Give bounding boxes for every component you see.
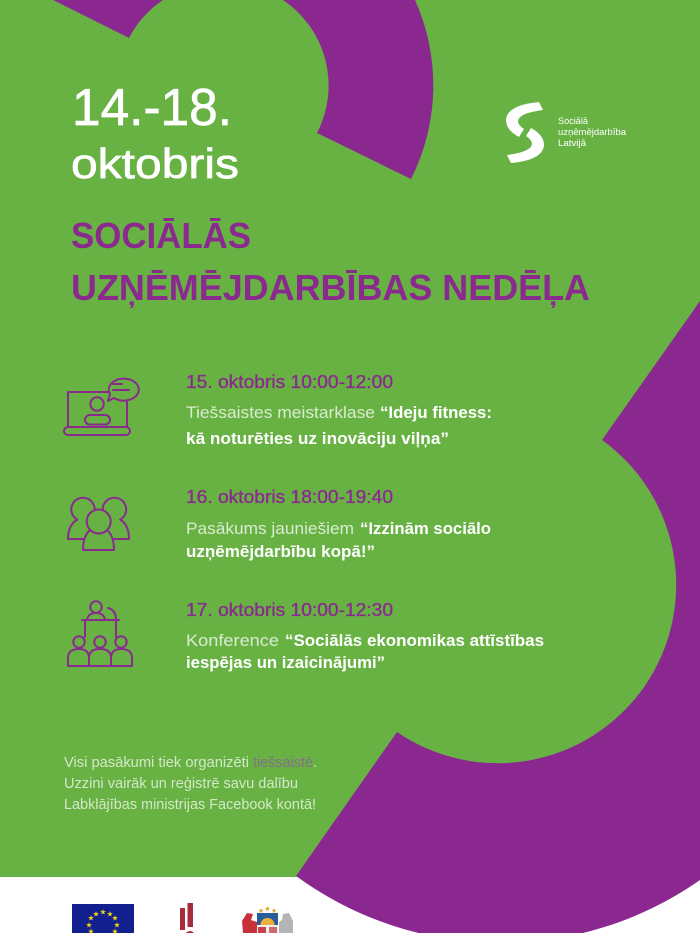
logo: coat of arms of Latvia: ★ bbox=[258, 907, 264, 915]
logo: EU flag: ★ bbox=[93, 910, 100, 918]
title: SOCIĀLĀS bbox=[71, 215, 251, 256]
event 2: 16. oktobris 18:00-19:40 bbox=[186, 487, 393, 507]
logo text: uzņēmējdarbība bbox=[558, 127, 626, 137]
date heading bbox=[71, 79, 239, 187]
event 1: “Ideju fitness: bbox=[380, 403, 492, 422]
logo text: Sociālā bbox=[558, 116, 588, 126]
event 3: 17. oktobris 10:00-12:30 bbox=[186, 600, 393, 620]
logo: coat of arms of Latvia bbox=[242, 905, 293, 933]
event 1: 15. oktobris 10:00-12:00 bbox=[186, 372, 393, 392]
logo: red mark bbox=[180, 903, 195, 933]
logo: EU flag: ★ bbox=[114, 920, 121, 930]
event 2: Pasākums jauniešiem bbox=[186, 519, 354, 538]
event 2: “Izzinām sociālo bbox=[360, 519, 491, 538]
logo: EU flag: ★ bbox=[100, 908, 107, 916]
logo text: Latvijā bbox=[558, 138, 586, 148]
large purple arc shape bbox=[296, 301, 700, 933]
date heading: 14.-18. bbox=[72, 79, 232, 137]
event 3: “Sociālās ekonomikas attīstības bbox=[285, 631, 544, 650]
closing note: Labklājības ministrijas Facebook kontā! bbox=[64, 797, 316, 813]
event 1: kā noturēties uz inovāciju viļņa” bbox=[186, 429, 449, 448]
closing note bbox=[64, 755, 317, 813]
logo: EU flag: ★ bbox=[88, 914, 95, 922]
logo: EU flag bbox=[72, 904, 134, 933]
top purple arc shape bbox=[53, 0, 433, 179]
closing note: . bbox=[313, 755, 317, 771]
logo: EU flag: ★ bbox=[112, 914, 119, 922]
title bbox=[71, 215, 590, 308]
event 3: Konference bbox=[186, 631, 279, 650]
event 2 bbox=[186, 487, 491, 561]
event 1 bbox=[186, 372, 492, 448]
event 3: iespējas un izaicinājumi” bbox=[186, 653, 385, 672]
icon: laptop with speaker bbox=[64, 379, 139, 435]
closing note: Uzzini vairāk un reģistrē savu dalību bbox=[64, 776, 298, 792]
date heading: oktobris bbox=[71, 140, 239, 187]
event 2: uzņēmējdarbību kopā!” bbox=[186, 542, 375, 561]
logo text bbox=[558, 116, 626, 148]
logo: coat of arms of Latvia: ★ bbox=[271, 907, 277, 915]
closing note: Visi pasākumi tiek organizēti bbox=[64, 755, 249, 771]
logo: coat of arms of Latvia: ★ bbox=[264, 905, 271, 913]
event 3 bbox=[186, 600, 544, 672]
event 1: Tiešsaistes meistarklase bbox=[186, 403, 375, 422]
logo: Sociālā uzņēmējdarbība Latvijā bbox=[506, 102, 626, 163]
icon: conference podium and audience bbox=[68, 601, 132, 666]
logo: EU flag: ★ bbox=[86, 920, 93, 930]
title: UZŅĒMĒJDARBĪBAS NEDĒĻA bbox=[71, 267, 590, 308]
icon: group of people bbox=[68, 498, 129, 550]
logo: EU flag: ★ bbox=[107, 910, 114, 918]
footer white band bbox=[0, 877, 700, 933]
icon: S mark bbox=[506, 102, 544, 163]
closing note: tiešsaistē bbox=[253, 755, 313, 771]
